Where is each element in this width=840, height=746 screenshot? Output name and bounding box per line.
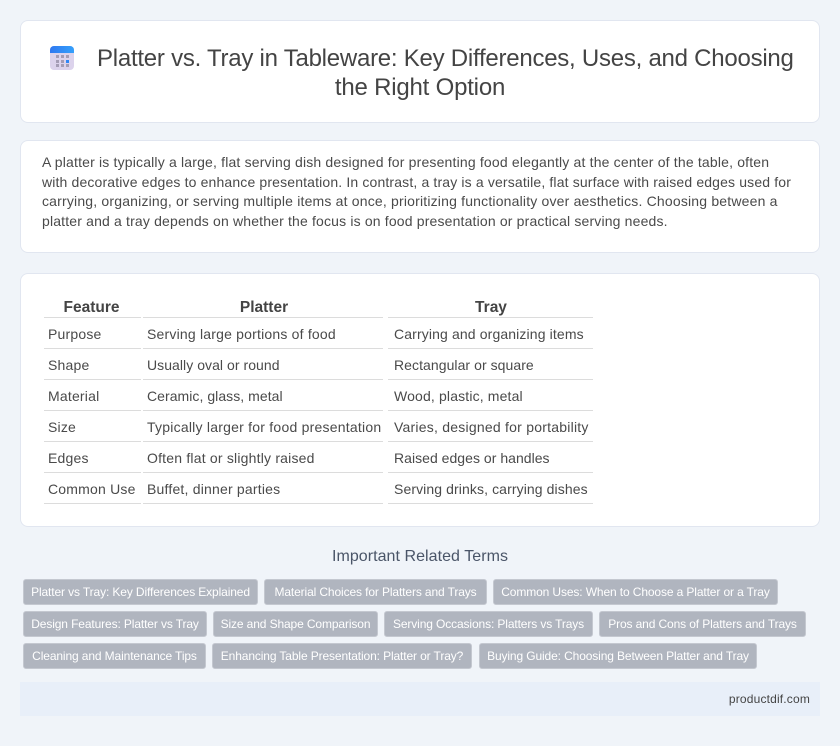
text block: intro paragraph xyxy=(42,154,791,229)
tag: Enhancing Table Presentation: Platter or Tray? xyxy=(221,649,463,663)
tag: Buying Guide: Choosing Between Platter and Tray xyxy=(487,649,749,663)
table row: shape: Rectangular or square xyxy=(394,357,534,373)
tag xyxy=(493,579,778,605)
table row: purpose: Carrying and organizing items xyxy=(394,326,584,342)
table row: size: Typically larger for food presentation xyxy=(147,419,381,435)
text block: intro paragraph: A platter is typically a large, flat serving dish designed for presenting food elegantly at the center of the table, often xyxy=(42,154,769,170)
tag xyxy=(384,611,593,637)
table row: purpose: Serving large portions of food xyxy=(147,326,336,342)
table header xyxy=(64,299,507,316)
tag: Size and Shape Comparison xyxy=(221,617,370,631)
text block: intro paragraph: carrying, organizing, or serving multiple items at once, prioritizing functionality over aesthetics. Choosing between a xyxy=(42,193,778,209)
table row: common use: Serving drinks, carrying dishes xyxy=(394,481,588,497)
panel: title card xyxy=(20,20,820,123)
text block: intro paragraph: platter and a tray depends on whether the focus is on food presentation or practical serving needs. xyxy=(42,213,668,229)
table row: material: Ceramic, glass, metal xyxy=(147,388,283,404)
tag: Pros and Cons of Platters and Trays xyxy=(608,617,797,631)
table row: purpose xyxy=(48,326,584,342)
title xyxy=(97,45,794,101)
table row: size: Size xyxy=(48,419,76,435)
table row: common use xyxy=(48,481,588,497)
table row: size: Varies, designed for portability xyxy=(394,419,589,435)
table row: edges: Edges xyxy=(48,450,89,466)
panel: intro text xyxy=(20,140,820,253)
panel: comparison table xyxy=(20,273,820,527)
table row: common use: Common Use xyxy=(48,481,136,497)
table row: material xyxy=(48,388,523,404)
tag xyxy=(23,579,258,605)
table row: edges: Raised edges or handles xyxy=(394,450,550,466)
table row: edges xyxy=(48,450,550,466)
tag: Cleaning and Maintenance Tips xyxy=(32,649,197,663)
table row: shape xyxy=(48,357,534,373)
tag xyxy=(264,579,487,605)
tag xyxy=(599,611,806,637)
text block: intro paragraph: with decorative edges to enhance presentation. In contrast, a tray is a versatile, flat surface with raised edges used for xyxy=(42,174,791,190)
table row: shape: Usually oval or round xyxy=(147,357,280,373)
tag xyxy=(23,643,206,669)
tag: Platter vs Tray: Key Differences Explained xyxy=(31,585,250,599)
table header: Tray xyxy=(475,299,507,316)
tag xyxy=(212,643,472,669)
table header: Feature xyxy=(64,299,120,316)
related term tags xyxy=(23,579,806,669)
tag xyxy=(213,611,378,637)
table row: common use: Buffet, dinner parties xyxy=(147,481,280,497)
title: the Right Option xyxy=(335,74,505,101)
footer credit: productdif.com xyxy=(729,692,810,706)
table row: purpose: Purpose xyxy=(48,326,102,342)
icon: calendar xyxy=(50,46,74,70)
tag: Serving Occasions: Platters vs Trays xyxy=(393,617,584,631)
table row: edges: Often flat or slightly raised xyxy=(147,450,315,466)
table row: material: Wood, plastic, metal xyxy=(394,388,523,404)
tag xyxy=(479,643,757,669)
table row: material: Material xyxy=(48,388,99,404)
tag: Common Uses: When to Choose a Platter or a Tray xyxy=(501,585,770,599)
tag xyxy=(23,611,207,637)
heading: important related terms: Important Related Terms xyxy=(332,548,508,565)
footer bar xyxy=(20,682,820,716)
table header: Platter xyxy=(240,299,288,316)
title: Platter vs. Tray in Tableware: Key Differences, Uses, and Choosing xyxy=(97,45,794,72)
tag: Material Choices for Platters and Trays xyxy=(274,585,477,599)
table row: size xyxy=(48,419,589,435)
table row: shape: Shape xyxy=(48,357,89,373)
tag: Design Features: Platter vs Tray xyxy=(31,617,199,631)
